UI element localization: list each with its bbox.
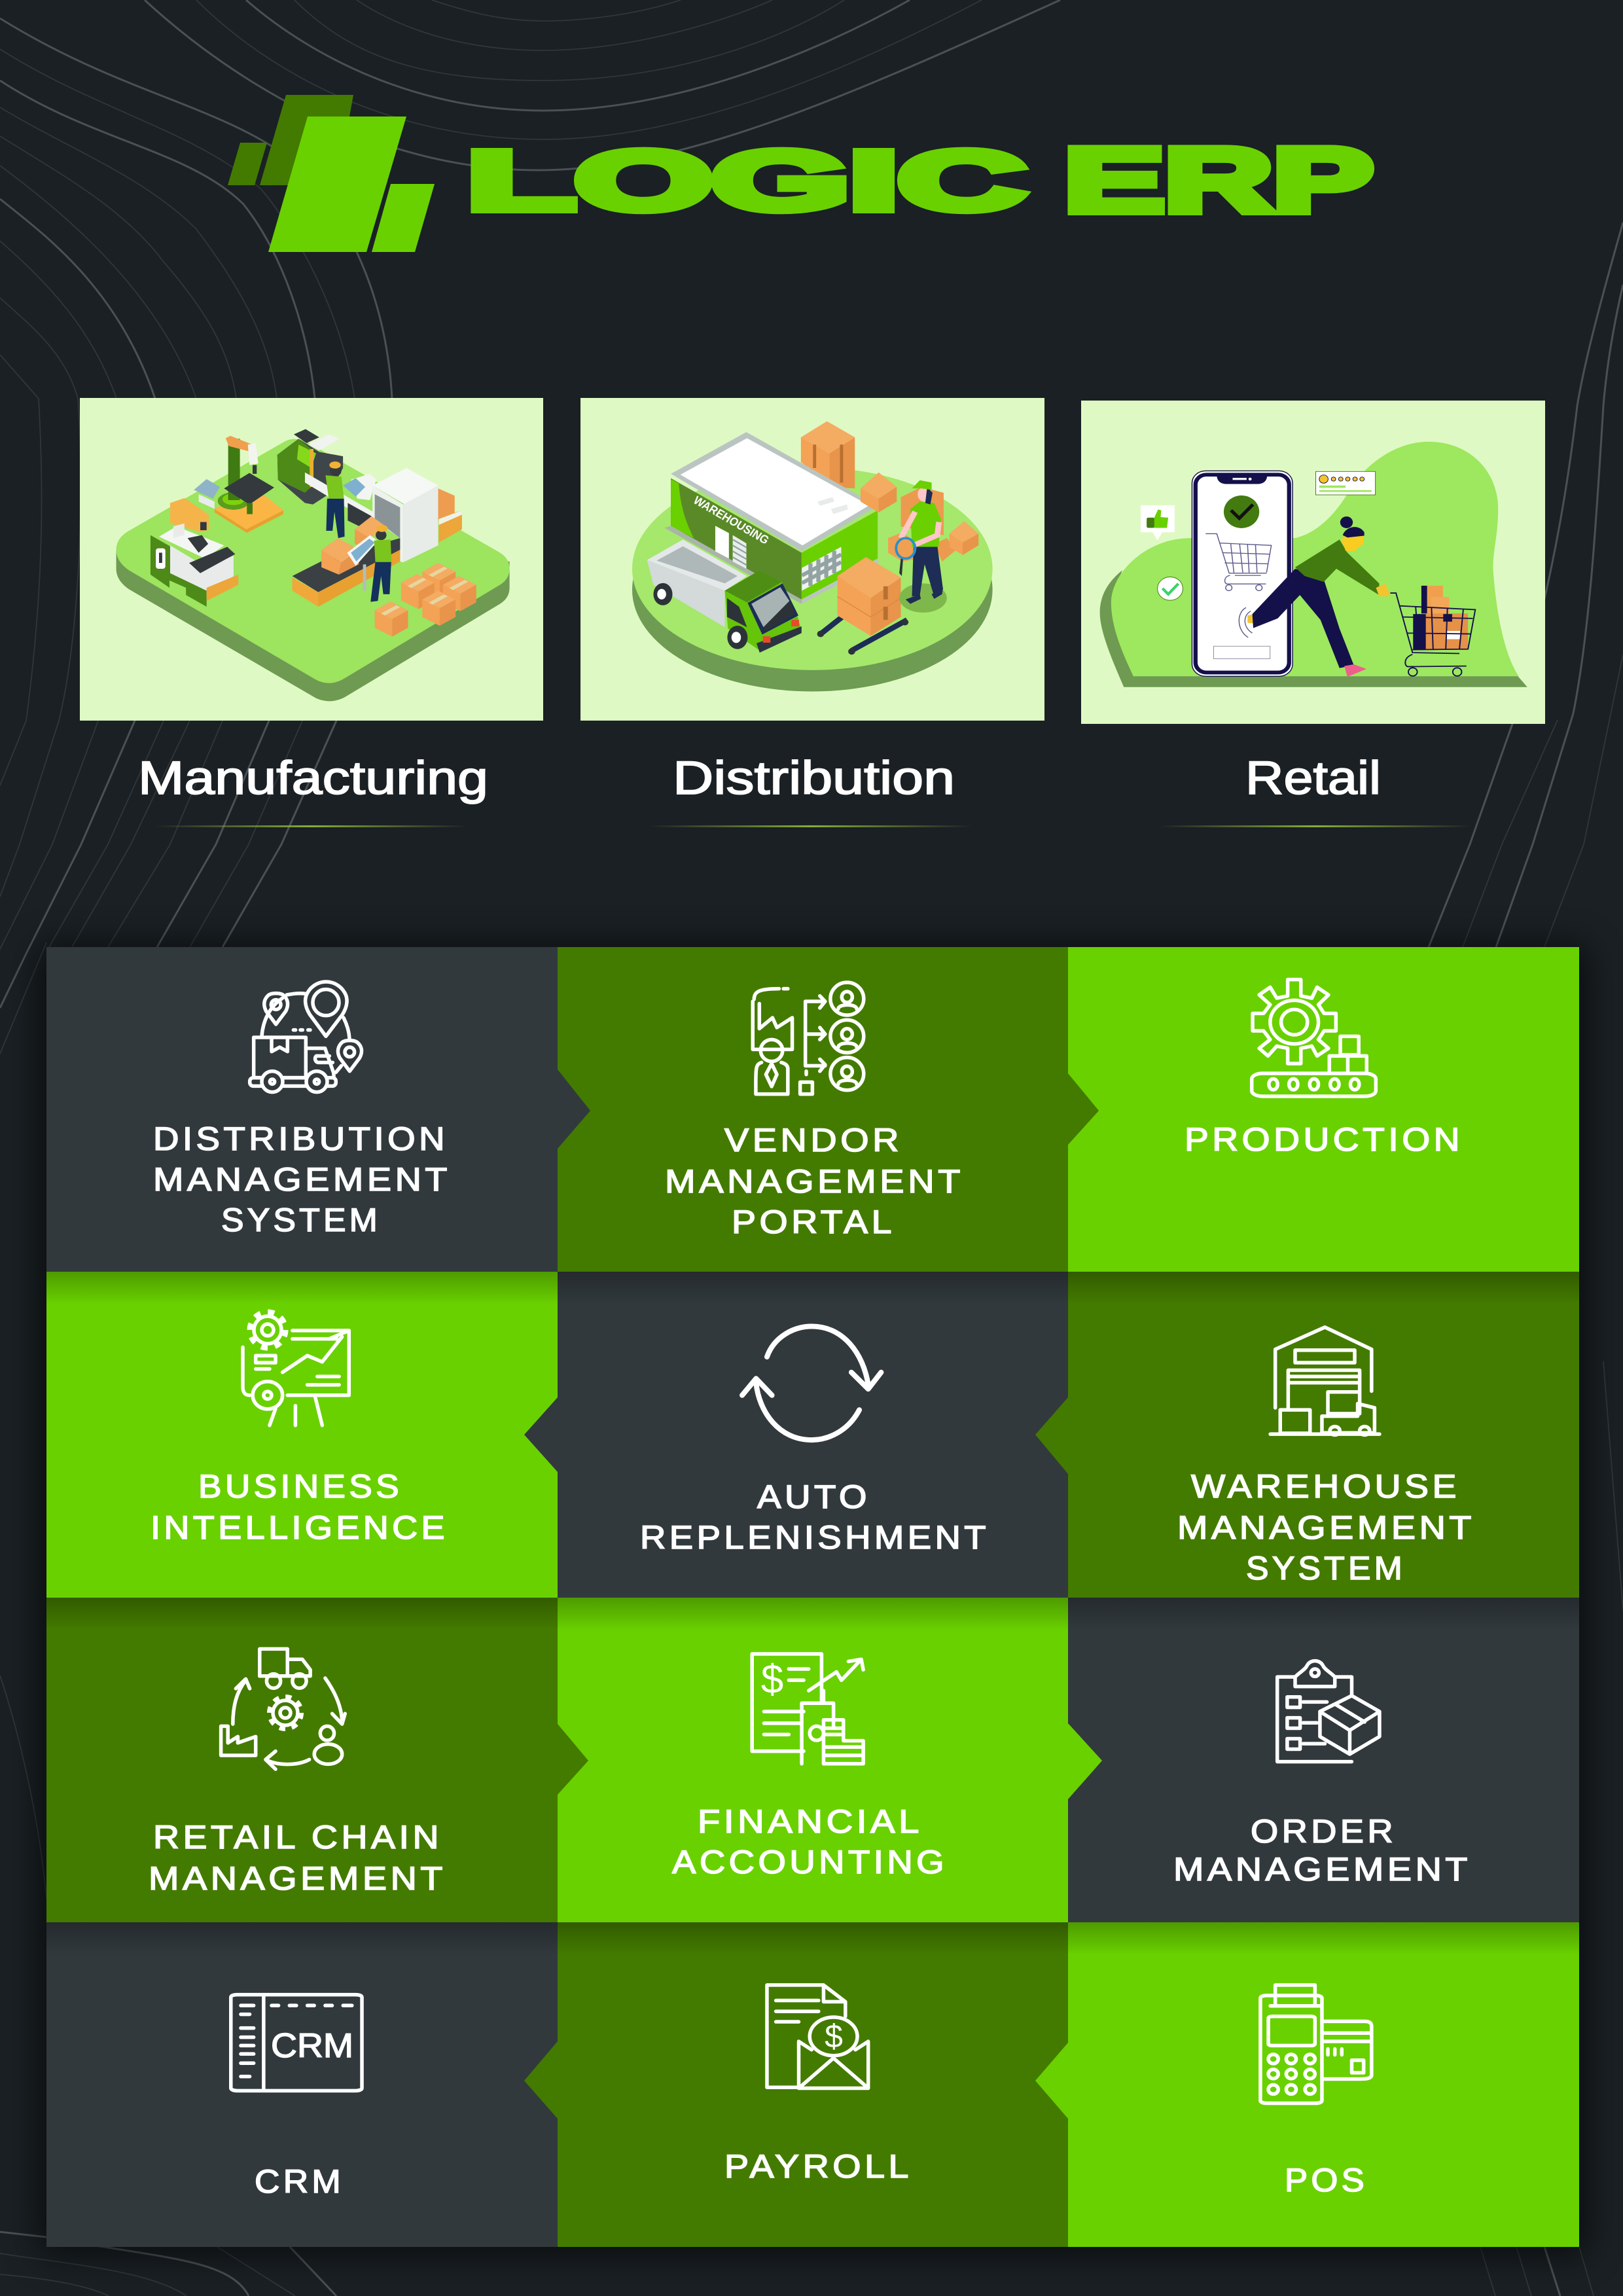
heading rule: [1158, 825, 1472, 827]
illustration background: retail: [1081, 401, 1545, 724]
grid shadow: [39, 946, 1586, 2255]
module grid: [46, 947, 1579, 2247]
label: [672, 1803, 948, 1880]
label: AUTO: [757, 1479, 870, 1515]
title: LOGIC ERP: [467, 130, 1373, 231]
heading: Manufacturing: Manufacturing: [138, 753, 488, 804]
arrow: row 1 middle to right: [1068, 1073, 1099, 1145]
panel: retail: [1081, 401, 1545, 827]
illustration background: distribution: [580, 398, 1044, 721]
label: MANAGEMENT: [153, 1161, 451, 1198]
label: [153, 1121, 451, 1238]
label: REPLENISHMENT: [640, 1519, 990, 1556]
arrow: row 4 right to middle: [1035, 2043, 1068, 2119]
icon: refresh arrows: [742, 1327, 881, 1440]
label: MANAGEMENT: [1177, 1509, 1475, 1546]
label: [665, 1122, 964, 1240]
heading: Retail: Retail: [1245, 753, 1381, 804]
arrow: row 4 middle to left: [524, 2041, 558, 2119]
label: [1173, 1813, 1471, 1888]
icon: analytics board: [243, 1312, 349, 1426]
illustration: factory floor: [116, 429, 510, 701]
label: [151, 1468, 448, 1546]
icon: payroll envelope: $: [825, 2018, 843, 2054]
icon: warehouse: [1270, 1327, 1380, 1435]
icon: delivery truck with pins: [250, 982, 362, 1092]
arrow: row 3 middle to right: [1068, 1723, 1102, 1799]
arrow: row 1 left to right: [558, 1069, 590, 1149]
label: MANAGEMENT: [149, 1860, 446, 1897]
label: [640, 1479, 990, 1556]
cell: Order Management: [1068, 1598, 1579, 1922]
warehouse sign: WAREHOUSING: [691, 493, 772, 547]
label: INTELLIGENCE: [151, 1509, 448, 1546]
panel: distribution: [580, 398, 1044, 827]
heading: Distribution: Distribution: [673, 753, 955, 804]
label: VENDOR: [724, 1122, 902, 1158]
label: PAYROLL: [724, 2148, 912, 2185]
label: MANAGEMENT: [1173, 1851, 1471, 1888]
label: ACCOUNTING: [672, 1844, 948, 1880]
cell: Payroll: [558, 1922, 1068, 2247]
label: [1177, 1468, 1475, 1587]
logo mark: [228, 95, 435, 252]
heading rule: [154, 825, 468, 827]
title: LOGIC ERP: LOGIC: [467, 134, 1026, 228]
arrow: row 2 right to middle: [1035, 1397, 1068, 1474]
row shadows: [46, 1272, 1579, 1955]
panel: manufacturing: [80, 398, 543, 827]
cell: Auto Replenishment: [558, 1272, 1068, 1598]
arrow: row 3 left to middle: [558, 1724, 588, 1795]
label: PRODUCTION: [1185, 1121, 1463, 1158]
icon: order clipboard: [1277, 1661, 1380, 1762]
label: SYSTEM: [221, 1202, 381, 1238]
illustration background: manufacturing: [80, 398, 543, 721]
icon: CRM window: [231, 1995, 362, 2090]
label: DISTRIBUTION: [153, 1121, 448, 1157]
cell: Warehouse Management System: [1068, 1272, 1579, 1598]
cell: Business Intelligence: [46, 1272, 558, 1598]
illustration: mobile shopping: [1100, 442, 1527, 687]
cell: Financial Accounting: [558, 1598, 1068, 1922]
icon: CRM window: CRM: [271, 2027, 353, 2065]
label: PORTAL: [732, 1204, 895, 1240]
cell: Vendor Management Portal: [558, 947, 1068, 1272]
cell: POS: [1068, 1922, 1579, 2247]
icon: gear and conveyor: [1252, 980, 1376, 1096]
icon: retail chain cycle: [221, 1649, 345, 1769]
label: CRM: [255, 2163, 344, 2200]
icon: POS terminal: [1260, 1985, 1372, 2103]
title: LOGIC ERP: ERP: [1064, 130, 1373, 231]
illustration: warehouse and truck: [632, 422, 993, 691]
label: RETAIL CHAIN: [153, 1819, 442, 1856]
icon: financial report: $: [761, 1657, 783, 1702]
label: BUSINESS: [198, 1468, 402, 1505]
icon: vendor network: [753, 982, 864, 1094]
label: SYSTEM: [1246, 1550, 1406, 1587]
label: MANAGEMENT: [665, 1163, 964, 1200]
icon: financial report: [752, 1654, 863, 1764]
label: [149, 1819, 446, 1897]
arrow: row 2 middle to left: [524, 1397, 558, 1472]
label: ORDER: [1251, 1813, 1397, 1850]
label: POS: [1285, 2162, 1368, 2198]
icon: payroll envelope: [767, 1985, 868, 2088]
cell: Production: [1068, 947, 1579, 1272]
label: WAREHOUSE: [1191, 1468, 1460, 1505]
label: FINANCIAL: [698, 1803, 923, 1840]
cell: Retail Chain Management: [46, 1598, 558, 1922]
cell: CRM: [46, 1922, 558, 2247]
heading rule: [649, 825, 973, 827]
cell: Distribution Management System: [46, 947, 558, 1272]
